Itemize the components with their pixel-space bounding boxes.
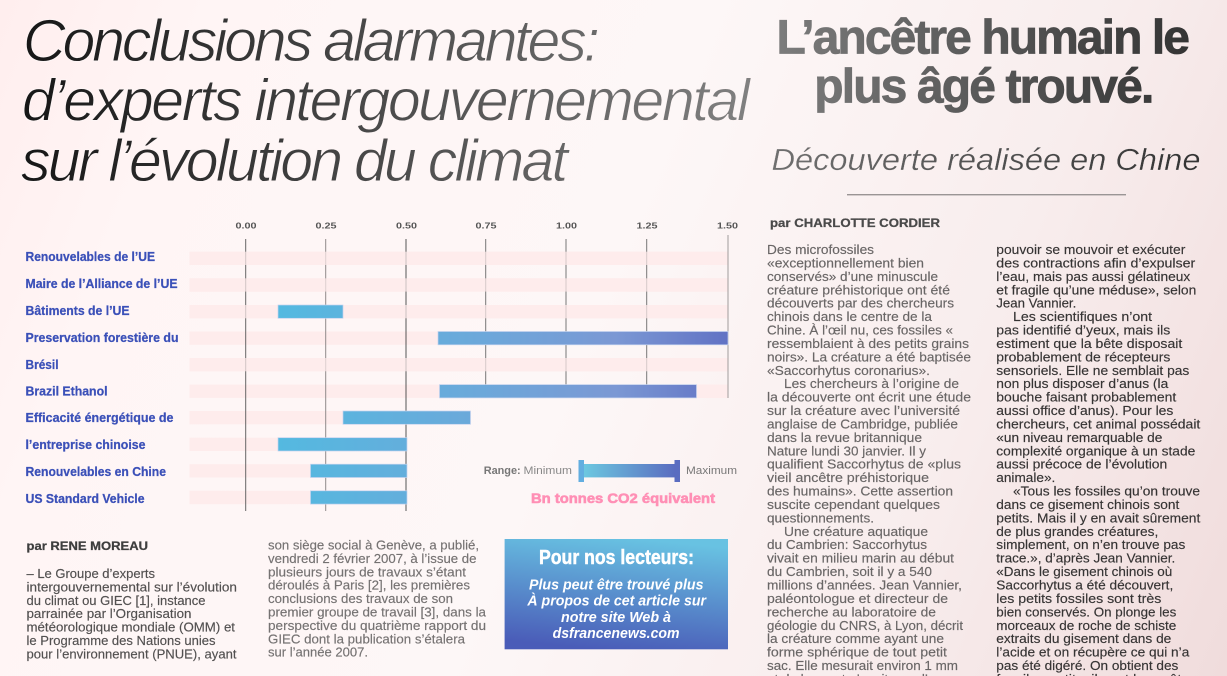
text column: article right: bien conservés. On plonge les: [996, 605, 1176, 619]
text column: article left: la créature comme ayant une: [767, 632, 944, 646]
callout text: À propos de cet article sur: [526, 592, 707, 610]
chart category labels: Preservation forestière du: [26, 331, 178, 345]
legend: range: Maximum: [686, 465, 737, 477]
title: sur l’évolution du climat: [21, 128, 571, 194]
chart category labels: US Standard Vehicle: [26, 492, 144, 506]
text column: article left: forme sphérique de tout petit: [767, 646, 948, 660]
text column: article right: aussi office d’anus). Pour les: [996, 404, 1173, 418]
byline: Rene Moreau: par RENE MOREAU: [26, 539, 148, 553]
text column: article left: Des microfossiles: [767, 243, 874, 257]
text column: article right: bouche faisant probablement: [996, 391, 1177, 405]
text column: article left: conservés» d’une minuscule: [767, 270, 938, 284]
text column: article right: Jean Vannier.: [996, 297, 1076, 311]
text column: climate left: le Programme des Nations unies: [26, 634, 216, 648]
text column: climate left: intergouvernemental sur l’évolution: [26, 580, 237, 594]
text column: article left: [767, 243, 971, 676]
callout text: notre site Web à: [561, 610, 671, 626]
text column: article right: «un niveau remarquable de: [996, 431, 1162, 445]
chart category labels: Brazil Ethanol: [26, 384, 108, 398]
text column: article right: simplement, on n’en trouve pas: [996, 538, 1185, 552]
title: d’experts intergouvernemental: [22, 68, 752, 134]
text column: article right: extraits du gisement dans de: [996, 632, 1171, 646]
text column: climate right: sur l’année 2007.: [268, 646, 368, 660]
chart category labels: Brésil: [26, 358, 58, 372]
divider rule: [847, 194, 1126, 195]
title: [21, 8, 752, 194]
text column: climate right: [268, 538, 486, 660]
text column: climate right: premier groupe de travail [3], dans la: [268, 606, 486, 620]
text column: article right: estiment que la bête disposait: [996, 337, 1183, 351]
text column: article right: pas été digéré. On obtient des: [996, 659, 1178, 673]
chart axis labels: 1.50: [717, 221, 738, 231]
text column: article right: pouvoir se mouvoir et exécuter: [996, 243, 1185, 257]
chart axis labels: 0.00: [236, 221, 257, 231]
chart axis labels: 1.25: [636, 221, 658, 231]
text column: climate right: plusieurs jours de travaux s’étant: [268, 565, 467, 579]
chart category labels: l’entreprise chinoise: [26, 438, 146, 452]
chart category labels: [26, 250, 178, 506]
chart category labels: Renouvelables de l’UE: [26, 250, 155, 264]
chart unit caption: Bn tonnes CO2 équivalent: [531, 490, 715, 506]
text column: article left: du Cambrien, soit il y a 540: [767, 565, 932, 579]
text column: article right: et fragile qu’une méduse», selon: [996, 283, 1196, 297]
legend: range: [484, 460, 737, 482]
title: Conclusions alarmantes:: [23, 8, 600, 74]
callout text: dsfrancenews.com: [553, 626, 680, 642]
text column: article right: Les scientifiques n’ont: [1013, 310, 1153, 324]
text column: article right: Saccorhytus a été découvert,: [996, 578, 1173, 592]
text column: article right: l’eau, mais pas aussi gélatineux: [996, 270, 1191, 284]
legend: range: Range:: [484, 465, 521, 477]
text column: article left: vivait en milieu marin au début: [767, 552, 955, 566]
chart category labels: Efficacité énergétique de: [26, 411, 174, 425]
text column: article right: probablement de récepteurs: [996, 350, 1170, 364]
text column: article left: créature préhistorique ont été: [767, 283, 950, 297]
text column: article left: dans la revue britannique: [767, 431, 922, 445]
text column: article right: sensoriels. Elle ne semblait pas: [996, 364, 1189, 378]
text column: climate right: son siège social à Genève, a publié,: [268, 538, 479, 552]
text column: climate right: vendredi 2 février 2007, à l’issue de: [268, 552, 476, 566]
text column: article left: «Saccorhytus coronarius».: [767, 364, 930, 378]
bar chart: [26, 221, 738, 511]
text column: article right: pas identifié d’yeux, mais ils: [996, 324, 1170, 338]
chart axis labels: [236, 221, 738, 231]
text column: climate left: parrainée par l’Organisation: [26, 607, 192, 621]
text column: climate right: GIEC dont la publication s’étalera: [268, 632, 465, 646]
legend: range: Minimum: [524, 465, 572, 477]
text column: article right: morceaux de roche de schiste: [996, 619, 1176, 633]
text column: article left: noirs». La créature a été baptisée: [767, 350, 971, 364]
text column: climate left: du climat ou GIEC [1], instance: [26, 594, 206, 608]
chart category labels: Renouvelables en Chine: [26, 465, 166, 479]
heading: right article: plus âgé trouvé.: [814, 61, 1154, 114]
chart axis labels: 1.00: [556, 221, 577, 231]
text column: article right: chercheurs, cet animal possédait: [996, 418, 1201, 432]
text column: article left: Les chercheurs à l’origine de: [784, 377, 959, 391]
text column: article left: vieil ancêtre préhistorique: [767, 471, 929, 485]
chart axis labels: 0.25: [316, 221, 337, 231]
heading: right article: [776, 12, 1190, 114]
chart axis labels: 0.50: [396, 221, 417, 231]
text column: article left: Chine. À l’œil nu, ces fossiles «: [767, 322, 953, 338]
text column: article right: non plus disposer d’anus (la: [996, 377, 1168, 391]
text column: article left: ressemblaient à des petits grains: [767, 337, 969, 351]
text column: article right: de plus grandes créatures,: [996, 525, 1158, 539]
chart range bars: [278, 305, 728, 504]
text column: climate left: [26, 567, 237, 661]
byline: Charlotte Cordier: par CHARLOTTE CORDIER: [770, 216, 940, 230]
text column: article left: «exceptionnellement bien: [767, 256, 924, 270]
text column: article left: découverts par des chercheurs: [767, 297, 954, 311]
text column: article right: trace.», d’après Jean Vannier.: [996, 552, 1175, 566]
text column: article left: millions d’années. Jean Vannier,: [767, 578, 962, 592]
text column: article right: les petits fossiles sont très: [996, 592, 1161, 606]
text column: article left: Une créature aquatique: [784, 525, 928, 539]
text column: article left: sac. Elle mesurait environ 1 mm: [767, 659, 958, 673]
text column: article right: aussi précoce de l’évolution: [996, 458, 1167, 472]
text column: article right: [996, 243, 1201, 676]
text column: climate left: pour l’environnement (PNUE), ayant: [26, 647, 237, 661]
callout heading: Pour nos lecteurs:: [539, 546, 694, 569]
text column: climate right: déroulés à Paris [2], les premières: [268, 579, 470, 593]
text column: article right: dans ce gisement chinois sont: [996, 498, 1180, 512]
text column: article right: «Tous les fossiles qu’on trouve: [1013, 485, 1200, 499]
panel: readers callout: [505, 539, 728, 649]
text column: article left: suscite cependant quelques: [767, 498, 940, 512]
subheading: Découverte réalisée en Chine: [772, 142, 1200, 177]
chart row bands: [190, 252, 728, 504]
chart grid lines: [246, 235, 728, 511]
text column: article right: complexité organique à un stade: [996, 444, 1195, 458]
chart axis labels: 0.75: [476, 221, 497, 231]
text column: article right: des contractions afin d’expulser: [996, 256, 1195, 270]
text column: article left: recherche au laboratoire de: [767, 605, 936, 619]
text column: article left: sur la créature avec l’université: [767, 404, 960, 418]
text column: article right: l’acide et on récupère ce qui n’a: [996, 646, 1189, 660]
text column: climate right: conclusions des travaux de son: [268, 592, 453, 606]
chart band overlays: [190, 252, 728, 371]
chart category labels: Bâtiments de l’UE: [26, 304, 130, 318]
text column: article left: questionnements.: [767, 511, 874, 525]
text column: article left: qualifient Saccorhytus de «plus: [767, 458, 961, 472]
text column: article left: du Cambrien: Saccorhytus: [767, 538, 927, 552]
text column: climate right: perspective du quatrième rapport du: [268, 619, 486, 633]
text column: climate left: – Le Groupe d’experts: [26, 567, 155, 581]
text column: article right: «Dans le gisement chinois où: [996, 565, 1172, 579]
heading: right article: L’ancêtre humain le: [776, 12, 1190, 64]
callout text: Plus peut être trouvé plus: [529, 578, 704, 594]
text column: article left: anglaise de Cambridge, publiée: [767, 418, 958, 432]
text column: article left: paléontologue et directeur de: [767, 592, 948, 606]
text column: article left: la découverte ont écrit une étude: [767, 391, 971, 405]
text column: article left: des humains». Cette assertion: [767, 485, 953, 499]
text column: article right: petits. Mais il y en avait sûrement: [996, 511, 1201, 525]
text column: article left: chinois dans le centre de la: [767, 310, 932, 324]
text column: article left: géologie du CNRS, à Lyon, décrit: [767, 619, 964, 633]
text column: article left: Nature lundi 30 janvier. Il y: [767, 444, 927, 458]
text column: climate left: météorologique mondiale (OMM) et: [26, 621, 236, 635]
text column: article right: animale».: [996, 471, 1055, 485]
callout text: [526, 578, 707, 642]
chart category labels: Maire de l’Alliance de l’UE: [26, 277, 178, 291]
